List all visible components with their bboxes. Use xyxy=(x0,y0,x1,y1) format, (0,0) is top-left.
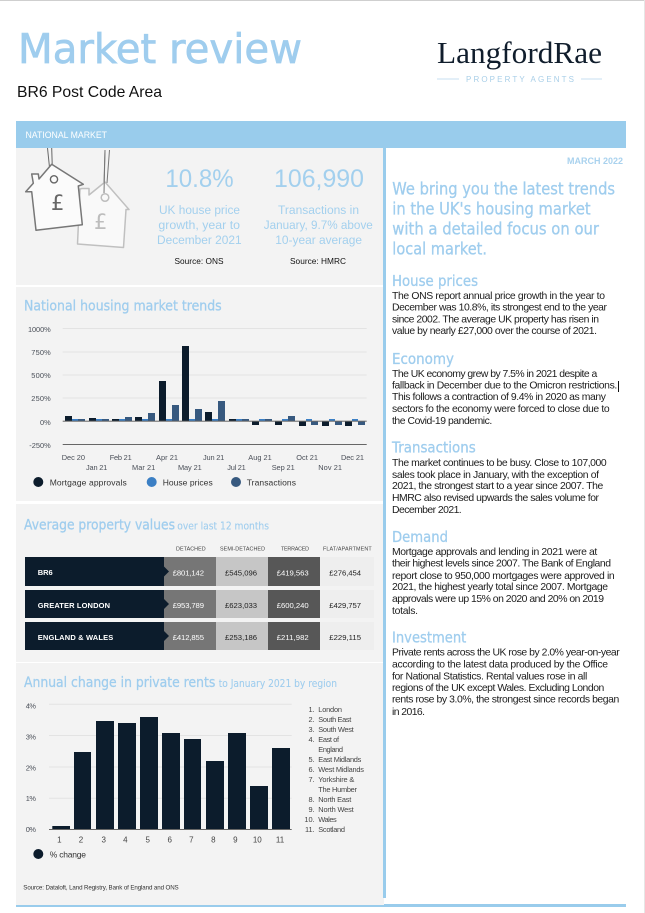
region key: The Humber xyxy=(318,785,358,794)
region key: East Midlands xyxy=(318,755,362,764)
table row: England and Wales: ENGLAND & WALES xyxy=(38,633,113,642)
table row: England and Wales: £229,115 xyxy=(329,633,361,642)
region key: 4. xyxy=(309,735,315,744)
table row: England and Wales: £253,186 xyxy=(225,633,257,642)
x axis labels xyxy=(62,453,364,472)
region key: 9. xyxy=(309,805,315,814)
stat: transactions: Source: HMRC xyxy=(290,256,346,266)
panel: national housing market trends xyxy=(16,287,383,501)
intro text: in the UK's housing market xyxy=(392,200,591,218)
table row: England and Wales: £412,855 xyxy=(173,633,204,642)
table row: BR6: BR6 xyxy=(38,568,53,577)
logo: LangfordRae: PROPERTY AGENTS xyxy=(466,75,574,84)
article: transactions: HMRC also revised upwards the sales volume for xyxy=(392,493,600,504)
article: house prices: since 2002. The average UK property has risen in xyxy=(392,315,599,326)
region key xyxy=(304,705,364,834)
legend: trends chart: Transactions xyxy=(247,478,296,488)
stat: transactions: 10-year average xyxy=(275,233,362,247)
article: demand: 2021, the highest yearly total since 2007. Mortgage xyxy=(392,582,608,593)
bar chart: private rents by region: 4 xyxy=(123,835,128,844)
bar chart: private rents by region: 7 xyxy=(189,835,194,844)
stat: house price growth: 10.8% xyxy=(165,165,234,193)
column headers: TERRACED xyxy=(281,547,309,553)
article: economy xyxy=(392,350,619,427)
region key: North West xyxy=(318,805,354,814)
heading: Annual change in private rents xyxy=(24,675,215,691)
region key: England xyxy=(318,745,343,754)
article: economy: the Covid-19 pandemic. xyxy=(392,416,492,427)
x axis labels: Mar 21 xyxy=(132,463,155,472)
bar chart: private rents by region: 6 xyxy=(167,835,172,844)
x axis labels: Dec 21 xyxy=(341,453,364,462)
region key: 8. xyxy=(309,795,315,804)
x axis labels: Dec 20 xyxy=(62,453,85,462)
region key: South East xyxy=(318,715,351,724)
article: investment: in 2016. xyxy=(392,707,425,718)
table row: BR6: £545,096 xyxy=(225,568,257,577)
article: investment: regions of the UK except Wales. Excluding London xyxy=(392,683,605,694)
logo: LangfordRae: LangfordRae xyxy=(437,35,602,70)
stat: transactions: 106,990 xyxy=(274,165,364,193)
bar chart: housing trends: 250% xyxy=(31,394,51,403)
bar chart: private rents by region: 1 xyxy=(57,835,62,844)
table row: BR6: £276,454 xyxy=(329,568,362,577)
section banner: national market: NATIONAL MARKET xyxy=(26,130,107,140)
heading: to January 2021 by region xyxy=(219,678,337,690)
series: house prices xyxy=(72,419,358,421)
region key: 2. xyxy=(309,715,315,724)
stat: house price growth xyxy=(157,165,242,266)
article: house prices xyxy=(392,272,608,337)
table row: Greater London xyxy=(25,590,374,618)
series: mortgage approvals xyxy=(65,346,352,426)
table row: Greater London: £623,033 xyxy=(225,601,257,610)
heading: National housing market trends xyxy=(24,299,222,315)
intro text: We bring you the latest trends xyxy=(392,180,615,198)
article: economy: This follows a contraction of 9.4% in 2020 as many xyxy=(392,392,607,403)
article: transactions: sales took place in January, with the exception of xyxy=(392,470,599,481)
article: investment xyxy=(392,629,620,718)
legend: trends chart: House prices xyxy=(163,478,213,488)
article: house prices: The ONS report annual price growth in the year to xyxy=(392,291,605,302)
region key: South West xyxy=(318,725,354,734)
region key: 11. xyxy=(305,825,315,834)
panel: headline statistics xyxy=(16,148,383,285)
x axis labels: Sep 21 xyxy=(272,463,295,472)
heading: Average property values xyxy=(24,517,175,533)
bar chart: private rents by region: 2% xyxy=(26,764,36,773)
bar chart: private rents by region: 11 xyxy=(276,835,285,844)
bar chart: private rents by region: 9 xyxy=(233,835,238,844)
column headers: SEMI-DETACHED xyxy=(220,547,265,553)
legend: rents chart xyxy=(33,849,86,860)
x axis labels: Aug 21 xyxy=(248,453,272,462)
stat: transactions: Transactions in xyxy=(278,203,359,217)
bar chart: housing trends: 0% xyxy=(40,418,51,427)
article: transactions: The market continues to be busy. Close to 107,000 xyxy=(392,458,607,469)
bar chart: housing trends xyxy=(28,325,367,472)
article: economy: Economy xyxy=(392,350,454,368)
x axis labels: Jan 21 xyxy=(86,463,107,472)
panel: annual change in private rents xyxy=(16,663,384,905)
column headers: DETACHED xyxy=(176,547,206,553)
x axis labels: Apr 21 xyxy=(156,453,178,462)
table row: Greater London: £429,757 xyxy=(329,601,361,610)
region key: 1. xyxy=(309,705,315,714)
region key: West Midlands xyxy=(318,765,364,774)
article: demand: Mortgage approvals and lending in 2021 were at xyxy=(392,547,597,558)
table row: England and Wales xyxy=(25,622,374,650)
column headers: FLAT/APARTMENT xyxy=(323,547,372,553)
article: demand: approvals were up 15% on 2020 and 20% on 2019 xyxy=(392,594,604,605)
bar chart: private rents by region xyxy=(26,701,292,844)
heading: over last 12 months xyxy=(177,520,269,532)
x axis labels: May 21 xyxy=(178,463,202,472)
bar chart: housing trends: 500% xyxy=(31,371,51,380)
article: transactions: 2021, the strongest start to a year since 2007. The xyxy=(392,481,604,492)
section banner: national market xyxy=(16,121,626,148)
region key: 5. xyxy=(309,755,315,764)
legend: trends chart xyxy=(33,477,296,488)
bar chart: private rents by region: 4% xyxy=(26,701,36,710)
icon: dark house price tag: £ xyxy=(51,191,64,215)
article: demand xyxy=(392,528,615,617)
bar chart: housing trends: 750% xyxy=(31,348,51,357)
x axis labels: Nov 21 xyxy=(318,463,342,472)
article: investment: rents rose by 3.0%, the strongest since records began xyxy=(392,695,620,706)
intro text: local market. xyxy=(392,240,487,258)
stat: transactions xyxy=(264,165,373,266)
article: investment: Private rents across the UK rose by 2.0% year-on-year xyxy=(392,648,620,659)
article: demand: totals. xyxy=(392,606,418,617)
x axis labels: Oct 21 xyxy=(296,453,318,462)
table row: Greater London: £953,789 xyxy=(173,601,204,610)
article: investment: Investment xyxy=(392,629,466,647)
bar chart: private rents by region: 8 xyxy=(211,835,216,844)
region key: 6. xyxy=(309,765,315,774)
article: demand: their highest levels since 2007. The Bank of England xyxy=(392,559,611,570)
panel: average property values xyxy=(16,504,383,662)
article: economy: fallback in December due to the Omicron restrictions. xyxy=(392,381,617,392)
article: investment: according to the latest data produced by the Office xyxy=(392,660,608,671)
source note: Source: Dataloft, Land Registry, Bank of England and ONS xyxy=(23,885,179,892)
column headers xyxy=(176,547,372,553)
stat: transactions: January, 9.7% above xyxy=(264,218,373,232)
article: economy: sectors fo the economy were forced to close due to xyxy=(392,404,610,415)
series: transactions xyxy=(78,401,365,425)
region key: London xyxy=(318,705,342,714)
table row: Greater London: £600,240 xyxy=(277,601,309,610)
x axis labels: Jun 21 xyxy=(203,453,224,462)
x axis labels: Feb 21 xyxy=(110,453,132,462)
region key: Yorkshire & xyxy=(318,775,354,784)
column divider and bottom rule xyxy=(16,148,626,907)
table row: England and Wales: £211,982 xyxy=(277,633,309,642)
title: Market review xyxy=(18,25,302,73)
table row: BR6: £801,142 xyxy=(173,568,204,577)
article: demand: Demand xyxy=(392,528,448,546)
region key: East of xyxy=(318,735,340,744)
stat: house price growth: December 2021 xyxy=(157,233,242,247)
table row: Greater London: GREATER LONDON xyxy=(38,601,110,610)
subtitle: BR6 Post Code Area xyxy=(17,84,162,101)
bar chart: private rents by region: 5 xyxy=(145,835,150,844)
x axis labels: Jul 21 xyxy=(227,463,246,472)
article: transactions xyxy=(391,439,607,516)
article: transactions: Transactions xyxy=(391,439,476,457)
article: demand: report close to 950,000 mortgages were approved in xyxy=(392,571,615,582)
stat: house price growth: growth, year to xyxy=(158,218,240,232)
bar chart: private rents by region: 0% xyxy=(26,825,36,834)
icon: dark house price tag xyxy=(26,148,83,230)
article: transactions: December 2021. xyxy=(392,505,462,516)
bar chart: private rents by region: 3 xyxy=(101,835,106,844)
article: house prices: House prices xyxy=(392,272,478,290)
intro text xyxy=(392,180,615,258)
stat: house price growth: Source: ONS xyxy=(174,256,224,266)
article: investment: for National Statistics. Rental values rose in all xyxy=(392,672,587,683)
legend: trends chart: Mortgage approvals xyxy=(50,478,127,488)
region key: 3. xyxy=(309,725,315,734)
icon: light house price tag xyxy=(78,150,129,248)
legend: rents chart: % change xyxy=(50,850,86,860)
region key: Scotland xyxy=(318,825,345,834)
date label: MARCH 2022 xyxy=(567,156,623,167)
bar chart: private rents by region: 3% xyxy=(26,732,36,741)
table row: BR6 xyxy=(25,557,374,586)
bar chart: housing trends: 1000% xyxy=(28,325,51,334)
bar chart: housing trends: -250% xyxy=(29,441,51,450)
article: economy: The UK economy grew by 7.5% in 2021 despite a xyxy=(392,369,598,380)
region key: 7. xyxy=(309,775,315,784)
article: house prices: value by nearly £27,000 over the course of 2021. xyxy=(392,326,597,337)
icon: light house price tag: £ xyxy=(94,210,107,234)
region key: North East xyxy=(318,795,351,804)
table row: BR6: £419,563 xyxy=(277,568,309,577)
region key: 10. xyxy=(304,815,315,824)
bar chart: private rents by region: 1% xyxy=(26,794,36,803)
region key: Wales xyxy=(318,815,337,824)
bar chart: private rents by region: 10 xyxy=(253,835,262,844)
bar chart: private rents by region: 2 xyxy=(79,835,84,844)
stat: house price growth: UK house price xyxy=(159,203,240,217)
intro text: with a detailed focus on our xyxy=(392,220,599,238)
article: house prices: December was 10.8%, its strongest end to the year xyxy=(392,303,608,314)
